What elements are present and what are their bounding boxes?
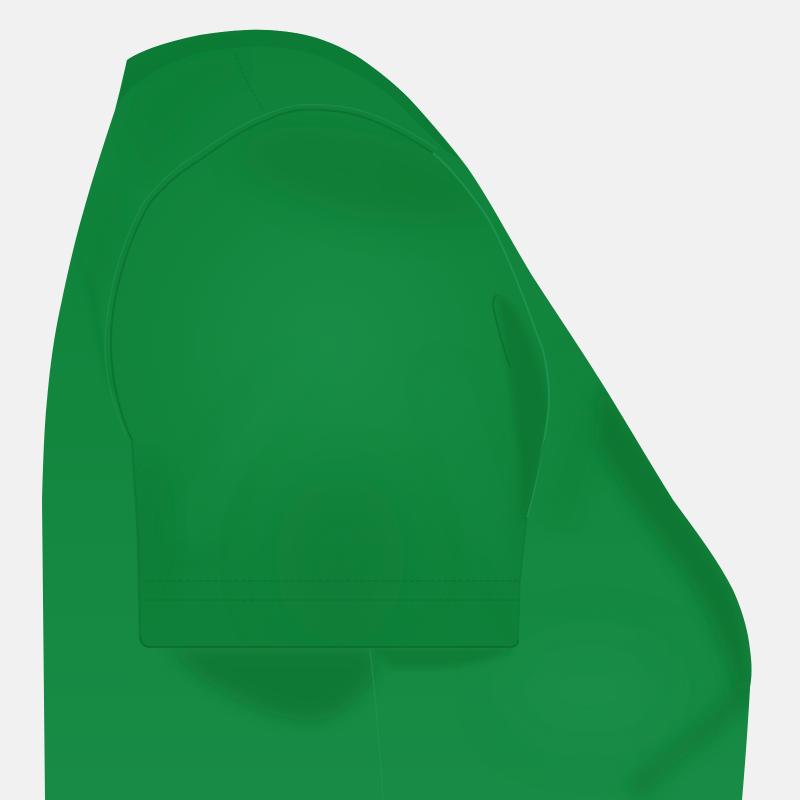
sleeve fold: [493, 295, 510, 367]
sleeve seam highlight: [105, 105, 437, 436]
lower centre shade: [275, 475, 405, 645]
hem cast shadow: [170, 648, 376, 722]
sleeve hem stitching lower: [144, 599, 520, 601]
highlight band left: [190, 370, 300, 540]
armhole shadow under seam: [540, 340, 600, 530]
sleeve lower right edge: [518, 517, 527, 640]
sleeve seam shadow: [111, 110, 433, 440]
sleeve hem stitching upper: [143, 580, 520, 582]
sleeve lower left edge: [132, 440, 150, 647]
collar inner shadow: [131, 52, 238, 175]
body highlight: [510, 645, 670, 735]
body fold line: [370, 650, 376, 700]
sleeve: [105, 105, 549, 647]
collar seam detail: [235, 53, 263, 110]
lower right fold: [636, 681, 751, 792]
hem cast shadow right: [382, 649, 505, 668]
shoulder shadow: [78, 206, 85, 230]
left crease: [90, 273, 130, 403]
hem bottom edge: [140, 637, 518, 647]
left lower shade: [128, 460, 172, 600]
sleeve seam right: [433, 153, 549, 517]
pocket shade: [499, 299, 547, 506]
collar rib band: [125, 30, 424, 115]
highlight band right: [440, 370, 505, 590]
right edge shading: [595, 380, 750, 712]
sleeve seam right shadow: [525, 440, 545, 520]
sleeve top shade: [332, 176, 440, 210]
hem fold right: [485, 560, 510, 645]
